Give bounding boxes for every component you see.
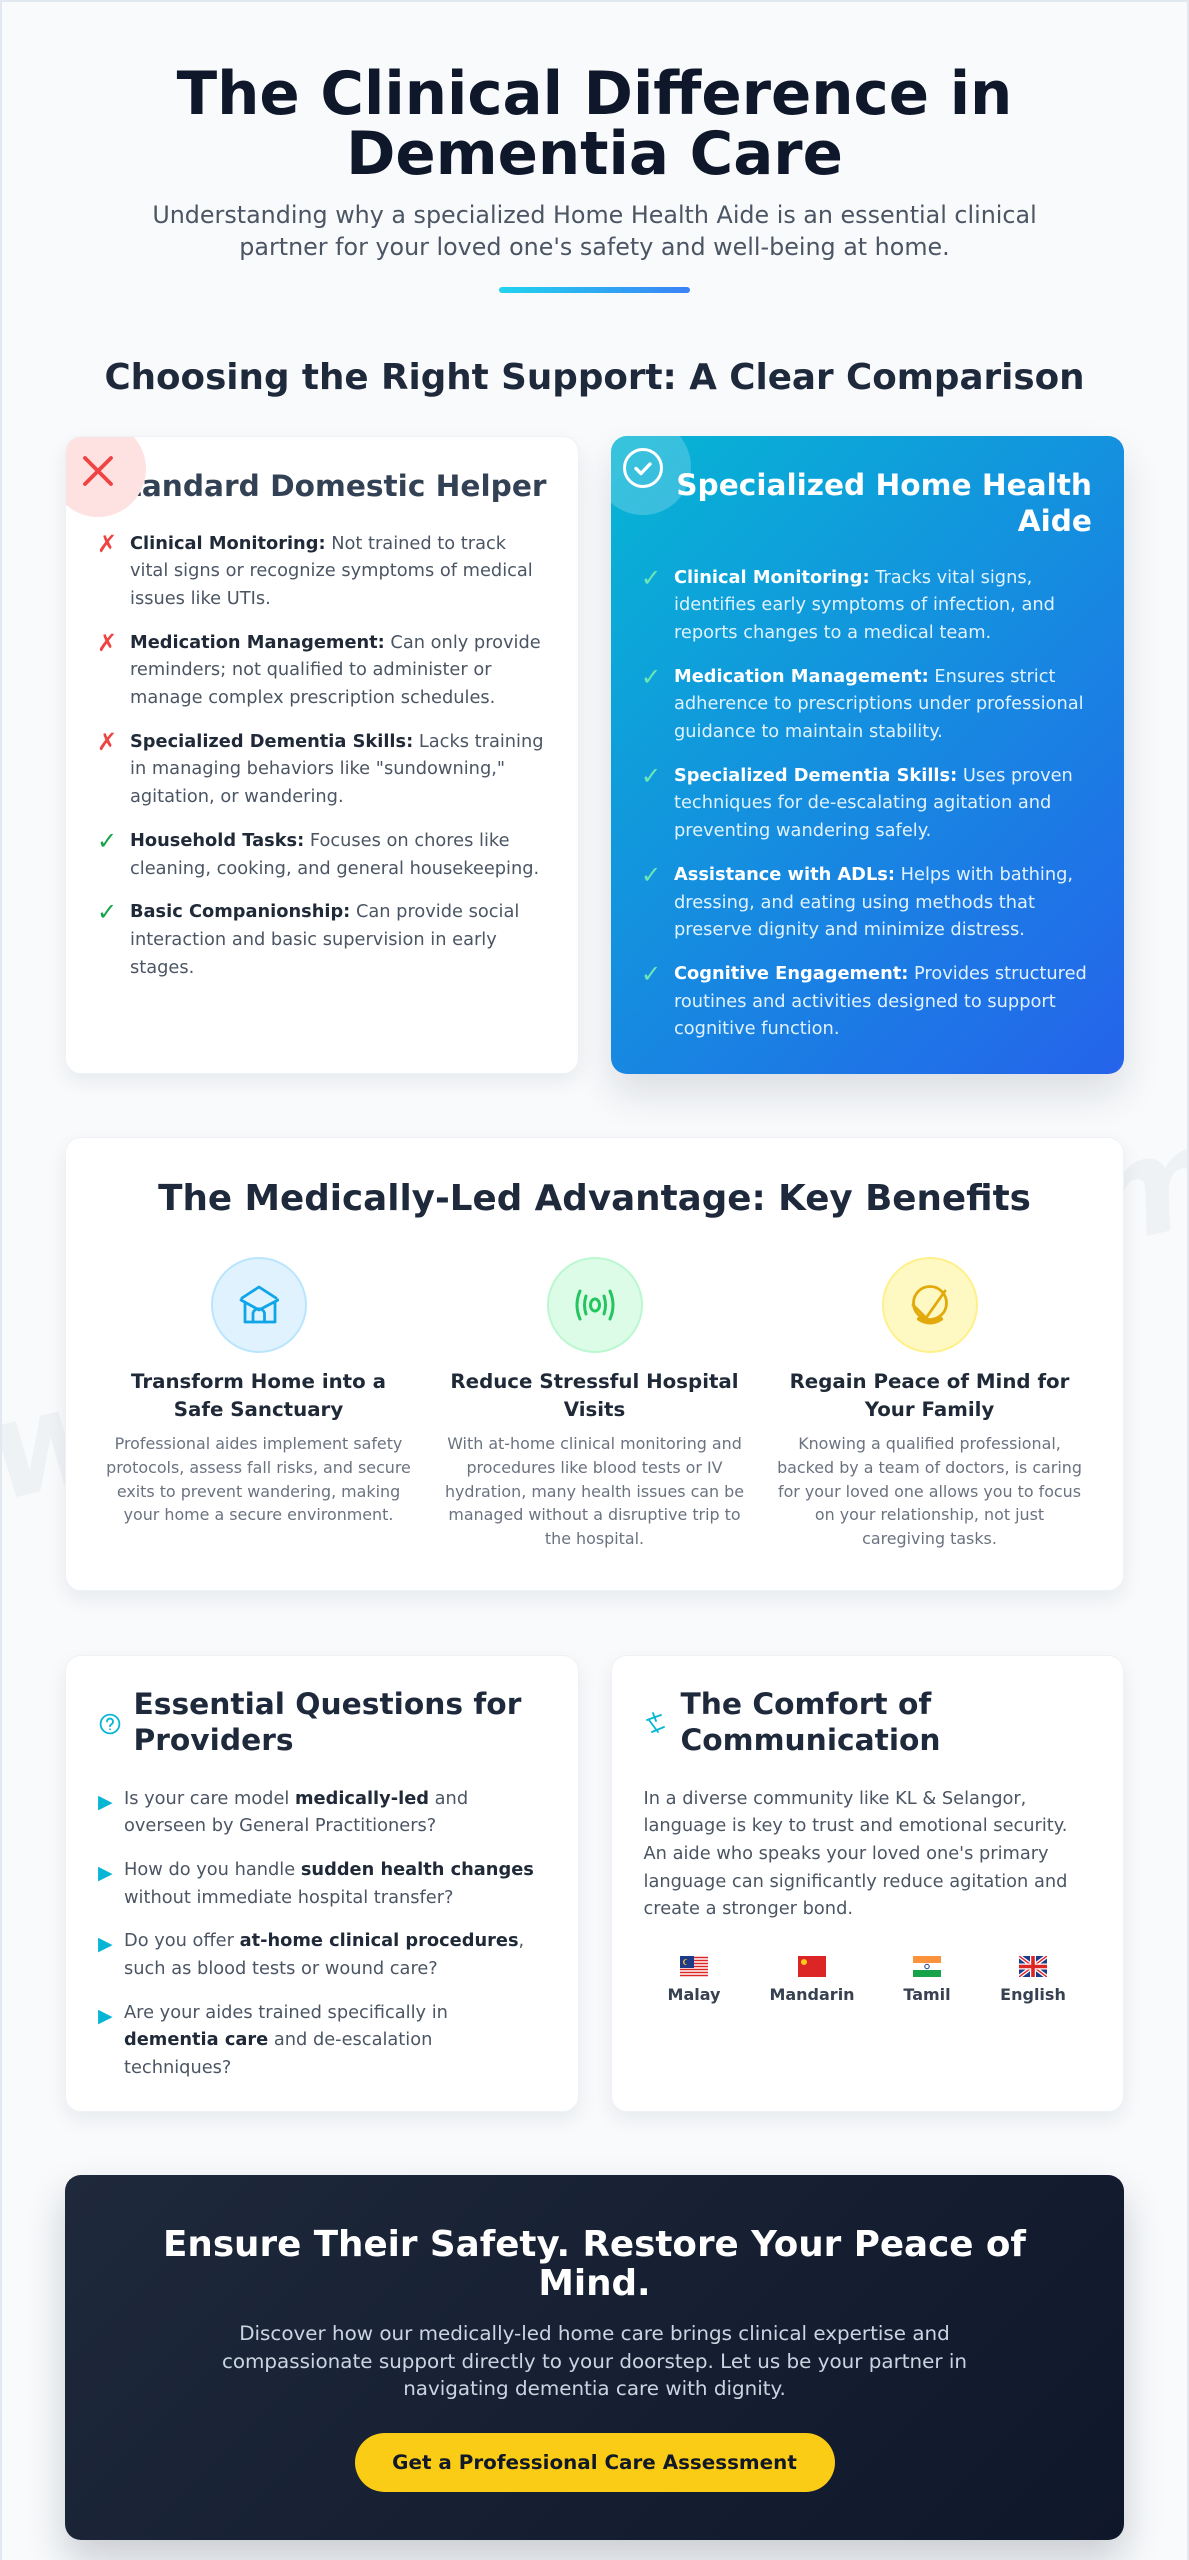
cta heading: Ensure Their Safety. Restore Your Peace of (163, 2224, 1026, 2265)
comparison list: stages. (130, 957, 194, 978)
icon: house (210, 1257, 306, 1353)
panel title: Providers (134, 1723, 294, 1758)
panel: essential questions (65, 1655, 578, 2112)
panel: specialized home health aide: ✓ (641, 861, 661, 889)
comparison list: Assistance with ADLs: Helps with bathing, (674, 864, 1073, 885)
body text: create a stronger bond. (644, 1898, 853, 1919)
panel title (676, 468, 1092, 538)
panel: standard domestic helper (65, 436, 578, 1074)
cta text: Discover how our medically-led home care brings clinical expertise and (239, 2322, 950, 2345)
icon: check shield (882, 1257, 978, 1353)
panel: specialized home health aide: ✓ (641, 960, 661, 988)
title: The Clinical Difference in (177, 60, 1012, 129)
question list: without immediate hospital transfer? (124, 1887, 453, 1908)
heading: benefits: The Medically-Led Advantage: Key Benefits (158, 1178, 1031, 1218)
comparison list: Clinical Monitoring: Tracks vital signs, (674, 566, 1032, 588)
title: Dementia Care (346, 120, 843, 189)
title (176, 60, 1012, 189)
benefit 3: Your Family (865, 1398, 994, 1421)
comparison list: Household Tasks: Focuses on chores like (130, 830, 510, 851)
subtitle (152, 201, 1037, 260)
comparison list: preserve dignity and minimize distress. (674, 919, 1025, 940)
body text: In a diverse community like KL & Selangor, (644, 1788, 1026, 1808)
benefit 2: Reduce Stressful Hospital (450, 1370, 739, 1393)
comparison list: Specialized Dementia Skills: Uses proven (674, 765, 1073, 786)
benefit 1 (106, 1370, 411, 1524)
benefit 3: Knowing a qualified professional, (798, 1434, 1061, 1453)
comparison list (641, 564, 1087, 1039)
question list: dementia care and de-escalation (124, 2029, 432, 2050)
subtitle: Understanding why a specialized Home Health Aide is an essential clinical (152, 201, 1037, 229)
red badge with x icon (50, 421, 146, 517)
cta button: Get a Professional Care Assessment (392, 2451, 797, 2474)
comparison list: adherence to prescriptions under professional (674, 693, 1084, 714)
comparison list: techniques for de-escalating agitation and (674, 792, 1051, 813)
question list (98, 1788, 534, 2078)
heading: comparison: Choosing the Right Support: A Clear Comparison (104, 356, 1085, 398)
panel: standard domestic helper: ✓ (97, 827, 117, 855)
benefit 3: for your loved one allows you to focus (778, 1482, 1081, 1501)
panel: essential questions: ▶ (98, 1933, 113, 1955)
body text: language can significantly reduce agitation and (644, 1871, 1067, 1892)
comparison list: Medication Management: Ensures strict (674, 666, 1055, 687)
benefit 3: Regain Peace of Mind for (790, 1370, 1069, 1393)
benefit 3: caregiving tasks. (862, 1529, 997, 1548)
benefit 2: managed without a disruptive trip to (448, 1505, 741, 1524)
panel: essential questions: ▶ (98, 1862, 113, 1884)
check badge (594, 419, 690, 515)
question list: techniques? (124, 2057, 231, 2078)
comparison list (97, 530, 544, 978)
question list: How do you handle sudden health changes (124, 1859, 534, 1880)
comparison list: Cognitive Engagement: Provides structured (674, 963, 1087, 984)
comparison list: dressing, and eating using methods that (674, 892, 1035, 913)
comparison list: identifies early symptoms of infection, and (674, 594, 1055, 615)
comparison list: guidance to maintain stability. (674, 721, 943, 742)
question list: Do you offer at-home clinical procedures, (124, 1930, 524, 1951)
comparison list: reminders; not qualified to administer or (130, 659, 492, 680)
benefit 2: procedures like blood tests or IV (466, 1458, 723, 1477)
benefit 3 (777, 1370, 1082, 1548)
cta button (354, 2433, 834, 2492)
panel: key benefits background (65, 1137, 1124, 1591)
comparison list: interaction and basic supervision in early (130, 929, 497, 950)
panel title: The Comfort of (680, 1687, 931, 1722)
benefit 3: backed by a team of doctors, is caring (777, 1458, 1082, 1477)
body text: language is key to trust and emotional security. (644, 1815, 1067, 1836)
benefit 3: on your relationship, not just (815, 1505, 1044, 1524)
cta text: compassionate support directly to your doorstep. Let us be your partner in (222, 2350, 967, 2373)
panel: essential questions: ▶ (98, 2005, 113, 2027)
benefit 1: Transform Home into a (131, 1370, 386, 1393)
comparison list: Basic Companionship: Can provide social (130, 901, 519, 922)
panel title: Aide (1018, 504, 1092, 538)
panel title: Essential Questions for (134, 1687, 521, 1722)
comparison list: manage complex prescription schedules. (130, 687, 495, 708)
body text (644, 1788, 1067, 1919)
question list: overseen by General Practitioners? (124, 1815, 436, 1836)
benefit 2: hydration, many health issues can be (445, 1482, 744, 1501)
benefit 1: Professional aides implement safety (115, 1434, 402, 1453)
cta heading: Mind. (538, 2263, 651, 2304)
icon: translate (646, 1712, 665, 1733)
panel title (134, 1687, 522, 1758)
panel title: Specialized Home Health (676, 468, 1092, 502)
language: malay (668, 1956, 720, 2004)
benefit 2: With at-home clinical monitoring and (447, 1434, 742, 1453)
comparison list: issues like UTIs. (130, 588, 271, 609)
cta heading (163, 2224, 1026, 2304)
accent bar (499, 287, 690, 293)
benefit 1: protocols, assess fall risks, and secure (106, 1458, 411, 1477)
panel: call to action (65, 2175, 1124, 2540)
body text: An aide who speaks your loved one's primary (644, 1843, 1049, 1864)
panel: comfort of communication (610, 1655, 1124, 2112)
panel title: Communication (680, 1723, 941, 1758)
panel title: Standard Domestic Helper (106, 469, 546, 503)
question list: such as blood tests or wound care? (124, 1958, 438, 1979)
language: malay: Malay (668, 1985, 720, 2004)
panel: specialized home health aide: ✓ (641, 564, 661, 592)
comparison list: cognitive function. (674, 1018, 839, 1039)
language: english: English (1000, 1985, 1066, 2004)
panel title (680, 1687, 941, 1758)
cta text: navigating dementia care with dignity. (403, 2377, 786, 2400)
benefit 2: Visits (564, 1398, 625, 1421)
panel: specialized home health aide: ✓ (641, 663, 661, 691)
cta text (222, 2322, 967, 2400)
icon: signal (546, 1257, 642, 1353)
panel: standard domestic helper: ✗ (97, 530, 117, 558)
language: tamil: Tamil (903, 1985, 951, 2004)
benefit 2: the hospital. (545, 1529, 644, 1548)
benefit 1: Safe Sanctuary (174, 1398, 343, 1421)
comparison list: vital signs or recognize symptoms of medical (130, 560, 533, 581)
comparison list: routines and activities designed to support (674, 991, 1056, 1012)
benefit 2 (445, 1370, 744, 1548)
question list: Is your care model medically-led and (124, 1788, 468, 1808)
language: mandarin: Mandarin (769, 1985, 855, 2004)
benefit 1: your home a secure environment. (124, 1505, 393, 1524)
comparison list: Clinical Monitoring: Not trained to track (130, 532, 506, 554)
panel: standard domestic helper: ✓ (97, 898, 117, 926)
language: tamil (903, 1956, 951, 2004)
comparison list: cleaning, cooking, and general housekeeping. (130, 858, 539, 879)
comparison list: reports changes to a medical team. (674, 622, 991, 643)
panel: essential questions: ▶ (98, 1790, 113, 1812)
panel: standard domestic helper: ✗ (97, 629, 117, 657)
language: mandarin (769, 1956, 855, 2004)
panel: specialized home health aide (610, 436, 1124, 1074)
comparison list: agitation, or wandering. (130, 786, 344, 807)
language: english (1000, 1956, 1066, 2004)
subtitle: partner for your loved one's safety and well-being at home. (239, 232, 950, 260)
comparison list: Medication Management: Can only provide (130, 632, 541, 653)
panel: specialized home health aide: ✓ (641, 762, 661, 790)
comparison list: Specialized Dementia Skills: Lacks training (130, 731, 544, 752)
benefit 1: exits to prevent wandering, making (117, 1482, 400, 1501)
icon: question mark (100, 1714, 120, 1734)
question list: Are your aides trained specifically in (124, 2002, 448, 2023)
panel: standard domestic helper: ✗ (97, 728, 117, 756)
comparison list: preventing wandering safely. (674, 820, 931, 841)
comparison list: in managing behaviors like "sundowning," (130, 758, 505, 779)
